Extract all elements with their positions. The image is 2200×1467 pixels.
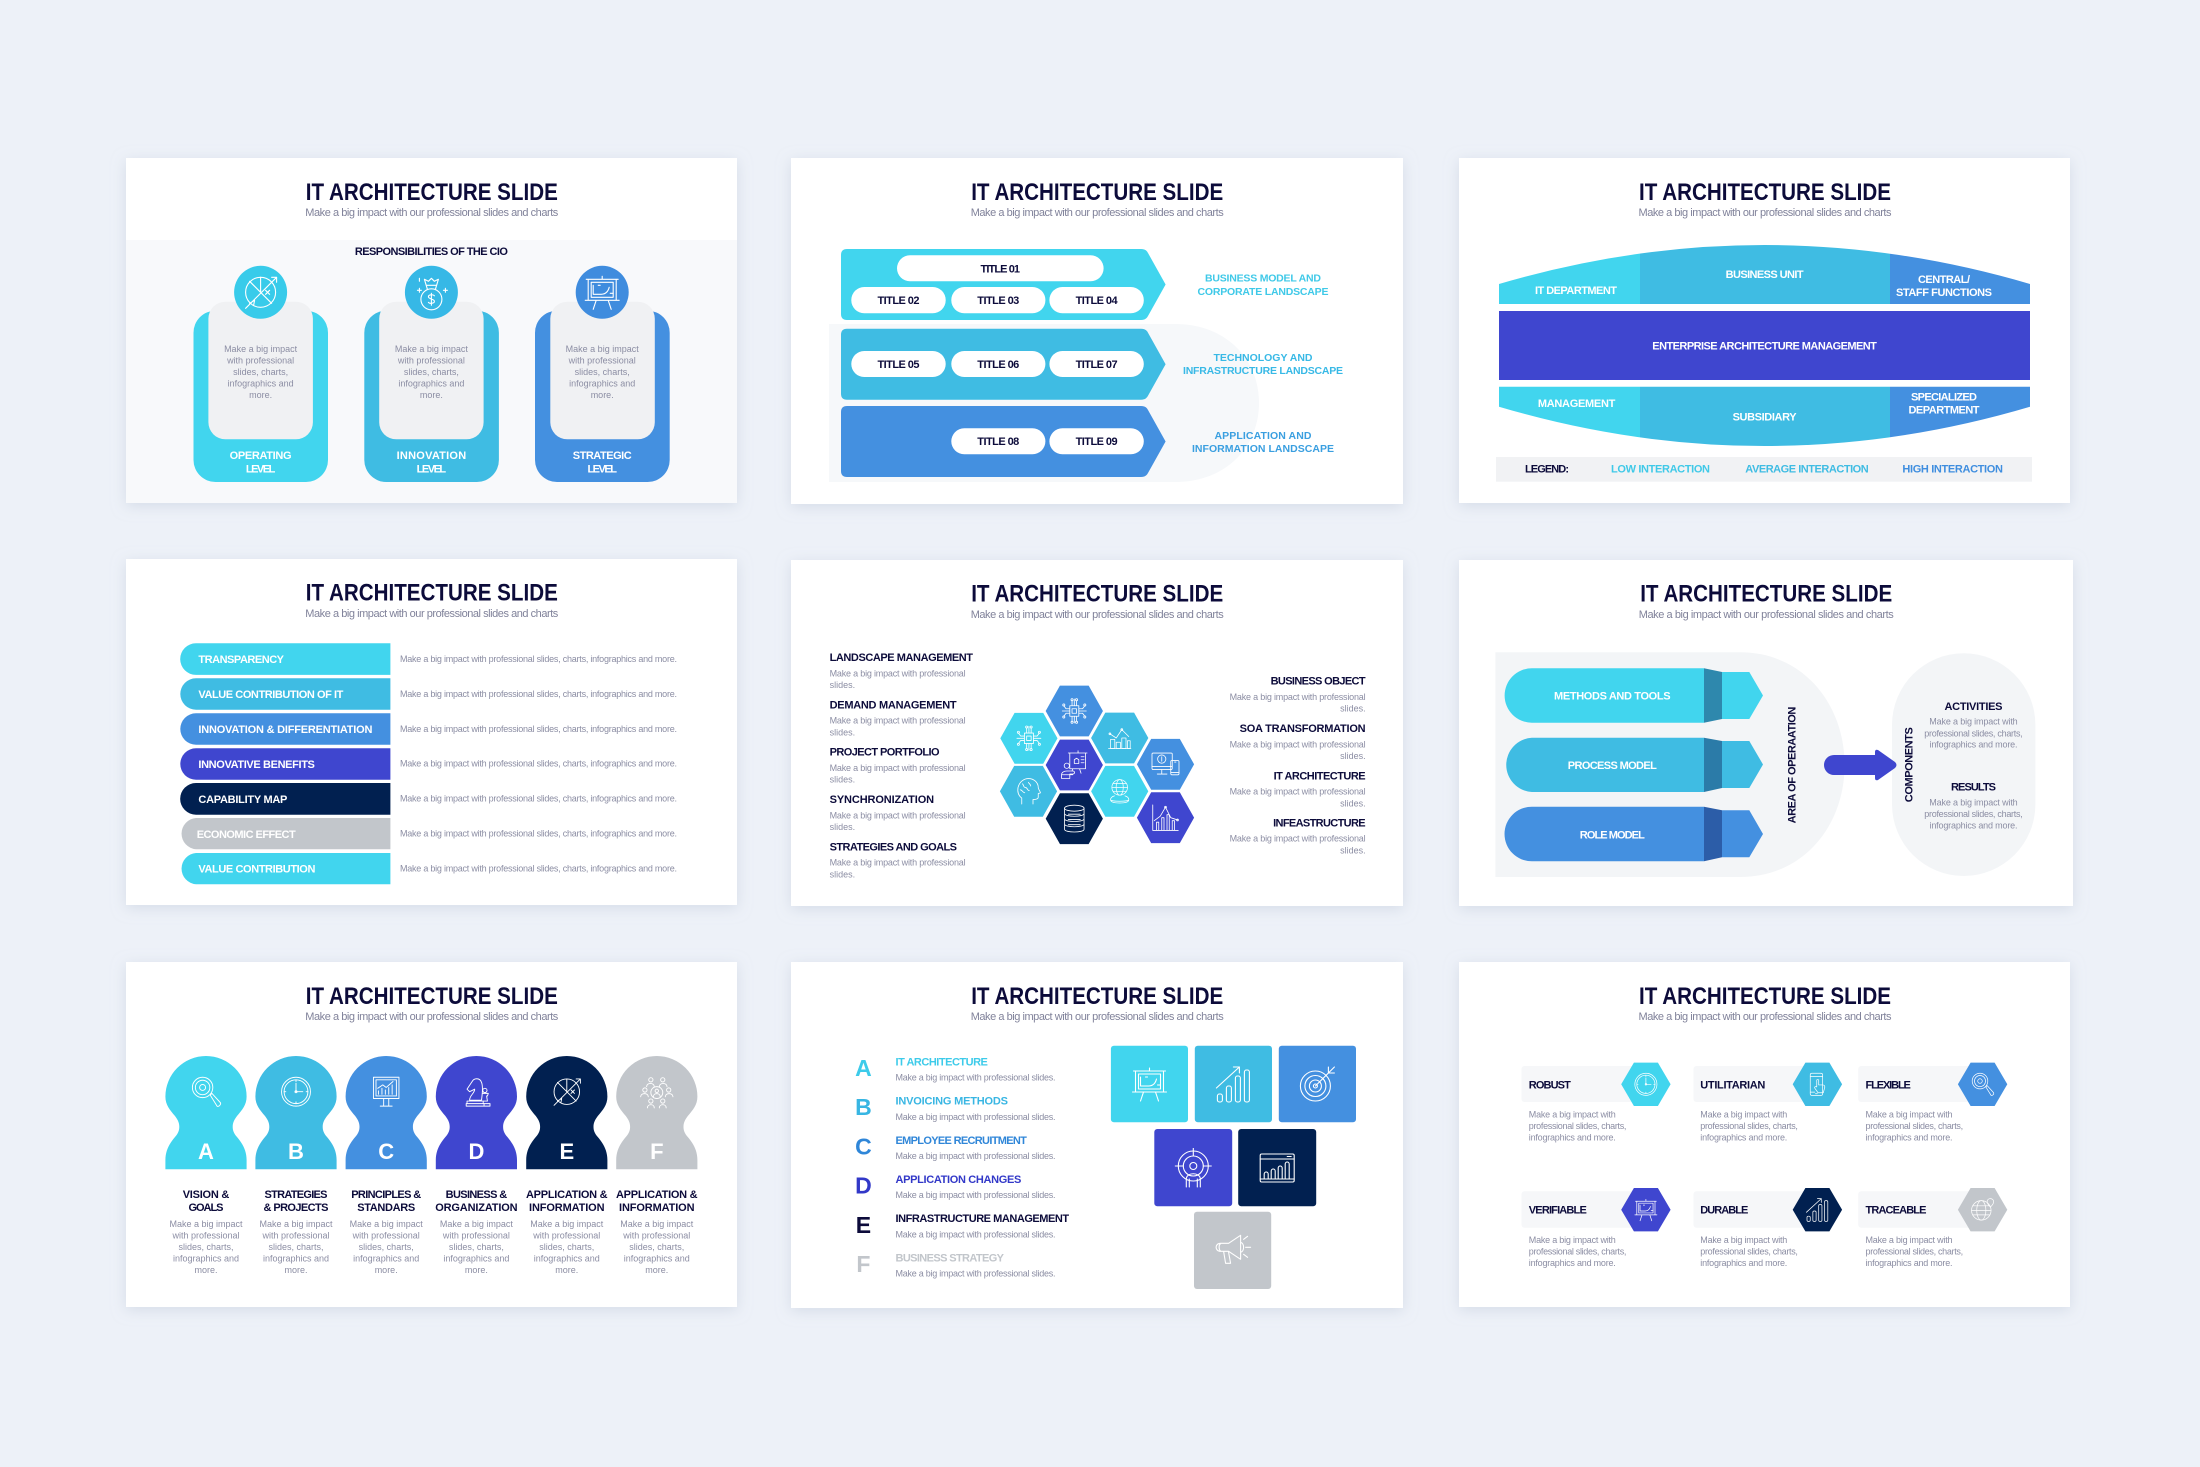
column E: Make a big impact: [530, 1219, 604, 1229]
column F: APPLICATION &: [616, 1189, 698, 1201]
column C: infographics and: [353, 1253, 419, 1263]
column C: [346, 1056, 427, 1275]
column C: Make a big impact: [350, 1219, 423, 1229]
bar: transparency: [180, 643, 677, 675]
column D: Make a big impact: [440, 1219, 513, 1229]
list item A: A: [855, 1055, 872, 1081]
title: IT ARCHITECTURE SLIDE: [971, 983, 1223, 1010]
title: IT ARCHITECTURE SLIDE: [1640, 581, 1892, 608]
list item E: Make a big impact with professional slides.: [896, 1229, 1056, 1239]
item: flexible: Make a big impact with: [1866, 1110, 1952, 1120]
arrow row 2: TITLE 07: [1076, 359, 1118, 371]
arrow row 1: TITLE 02: [878, 295, 920, 307]
bar: capability map: [180, 783, 677, 815]
panel: stacked value bars: [126, 559, 737, 905]
title: IT ARCHITECTURE SLIDE: [971, 179, 1223, 206]
list item D: [855, 1172, 1056, 1200]
slide background: [126, 559, 737, 905]
text: activities: Make a big impact with: [1929, 717, 2018, 727]
item: flexible: professional slides, charts,: [1866, 1121, 1963, 1131]
bar: value contribution of IT: Make a big impact with professional slides, charts, infographics and more.: [400, 689, 677, 699]
subtitle: Make a big impact with our professional slides and charts: [971, 609, 1224, 621]
item: traceable: [1858, 1188, 2007, 1268]
label: application: APPLICATION AND: [1214, 430, 1312, 442]
item: verifiable: Make a big impact with: [1529, 1235, 1616, 1245]
legend: AVERAGE INTERACTION: [1745, 463, 1869, 475]
text: activities: [1924, 701, 2023, 750]
legend: [1496, 457, 2032, 482]
left list: Make a big impact with professional: [830, 668, 966, 678]
bar: capability map: CAPABILITY MAP: [198, 794, 287, 806]
list item A: IT ARCHITECTURE: [896, 1056, 988, 1068]
card: strategic level: slides, charts,: [575, 367, 630, 377]
title: IT ARCHITECTURE SLIDE: [306, 179, 558, 206]
right list: INFEASTRUCTURE: [1273, 817, 1366, 829]
list item E: [856, 1212, 1069, 1239]
arrow row 3: TITLE 09: [1076, 436, 1118, 448]
card: innovation level: [364, 266, 499, 482]
item: utilitarian: Make a big impact with: [1700, 1110, 1787, 1120]
right list: slides.: [1340, 798, 1366, 808]
subtitle: Make a big impact with our professional slides and charts: [971, 1011, 1224, 1023]
left list: Make a big impact with professional: [830, 716, 966, 726]
item: verifiable: infographics and more.: [1529, 1258, 1616, 1268]
item: verifiable: VERIFIABLE: [1529, 1205, 1587, 1217]
column E: APPLICATION &: [526, 1189, 608, 1201]
slide background: [1459, 158, 2070, 503]
column F: Make a big impact: [620, 1219, 694, 1229]
gray band: [126, 240, 737, 503]
title: IT ARCHITECTURE SLIDE: [306, 580, 558, 607]
components pill: [1892, 653, 2035, 876]
card: operating level: Make a big impact: [224, 344, 298, 354]
column F: infographics and: [624, 1253, 690, 1263]
top lens labels: BUSINESS UNIT: [1726, 269, 1804, 281]
bar: innovative benefits: Make a big impact with professional slides, charts, infographics and more.: [400, 758, 677, 768]
column F: slides, charts,: [629, 1242, 684, 1252]
column B: more.: [284, 1265, 308, 1275]
label: business model: [1198, 272, 1328, 298]
text: activities: ACTIVITIES: [1944, 701, 2002, 713]
item: robust: [1522, 1063, 1671, 1143]
left list: slides.: [830, 822, 855, 832]
top lens: [1499, 240, 2030, 304]
item: utilitarian: [1694, 1063, 1842, 1143]
text: activities: professional slides, charts,: [1924, 728, 2023, 738]
arrow: methods and tools: [1505, 668, 1763, 723]
item: durable: infographics and more.: [1700, 1258, 1787, 1268]
text: results: RESULTS: [1951, 782, 1996, 794]
item: robust: ROBUST: [1529, 1079, 1571, 1091]
column F: [616, 1056, 698, 1275]
slide background: [1459, 560, 2073, 906]
label: business model: BUSINESS MODEL AND: [1205, 272, 1321, 284]
left list: slides.: [830, 775, 855, 785]
column C: more.: [375, 1265, 398, 1275]
slide background: [126, 962, 737, 1307]
item: durable: [1694, 1188, 1842, 1268]
column D: BUSINESS &: [446, 1189, 507, 1201]
panel: landscape arrows: [791, 158, 1403, 504]
list item D: Make a big impact with professional slides.: [896, 1190, 1056, 1200]
item: verifiable: professional slides, charts,: [1529, 1246, 1626, 1256]
label: technology: TECHNOLOGY AND: [1214, 352, 1313, 364]
column D: infographics and: [443, 1253, 509, 1263]
list item B: Make a big impact with professional slides.: [896, 1112, 1056, 1122]
connector arrow: [1824, 750, 1896, 780]
arrow row 1: [841, 249, 1166, 320]
right list: [1230, 676, 1366, 855]
top lens labels: IT DEPARTMENT: [1535, 285, 1617, 297]
bottom lens labels: SPECIALIZED: [1911, 392, 1977, 404]
card: operating level: slides, charts,: [233, 367, 288, 377]
gray backdrop: [1495, 652, 1845, 877]
enterprise architecture band: ENTERPRISE ARCHITECTURE MANAGEMENT: [1652, 340, 1877, 352]
gray backdrop: [829, 324, 1259, 482]
subtitle: Make a big impact with our professional slides and charts: [1638, 1011, 1892, 1023]
card: strategic level: STRATEGIC: [573, 450, 632, 462]
right list: slides.: [1340, 704, 1366, 714]
card: innovation level: INNOVATION: [397, 450, 466, 462]
bar: transparency: TRANSPARENCY: [198, 654, 285, 666]
bar: value contribution: [182, 853, 677, 884]
column D: [435, 1056, 518, 1275]
card: strategic level: more.: [591, 390, 614, 400]
right list: SOA TRANSFORMATION: [1240, 723, 1366, 735]
left list: Make a big impact with professional: [830, 810, 966, 820]
bar: innovation and differentiation: [180, 713, 677, 745]
list item B: INVOICING METHODS: [896, 1096, 1008, 1108]
left list: Make a big impact with professional: [830, 763, 966, 773]
vertical label: area of operation: AREA OF OPERAATION: [1786, 707, 1798, 823]
column A: VISION &: [183, 1189, 229, 1201]
bar: innovative benefits: [180, 748, 677, 780]
list item E: E: [856, 1212, 871, 1238]
panel: honeycomb: [791, 560, 1403, 906]
card: strategic level: with professional: [568, 356, 636, 366]
bar: value contribution of IT: [180, 678, 677, 710]
bar: economic effect: Make a big impact with professional slides, charts, infographics and more.: [400, 828, 677, 838]
card: innovation level: LEVEL: [417, 464, 446, 476]
column C: STANDARS: [357, 1202, 415, 1214]
left list: PROJECT PORTFOLIO: [830, 747, 940, 759]
column D: slides, charts,: [449, 1242, 504, 1252]
item: traceable: TRACEABLE: [1866, 1205, 1926, 1217]
icon tiles: [1111, 1046, 1356, 1289]
subtitle: Make a big impact with our professional slides and charts: [1638, 207, 1892, 219]
right list: slides.: [1340, 751, 1366, 761]
item: robust: Make a big impact with: [1529, 1110, 1616, 1120]
column F: more.: [645, 1265, 668, 1275]
column C: PRINCIPLES &: [351, 1189, 421, 1201]
list item F: [856, 1251, 1056, 1278]
list item C: C: [855, 1134, 872, 1160]
arrow: process model: PROCESS MODEL: [1568, 760, 1657, 772]
list item C: Make a big impact with professional slides.: [896, 1151, 1056, 1161]
item: verifiable: [1522, 1188, 1671, 1268]
list item F: BUSINESS STRATEGY: [896, 1252, 1005, 1264]
column F: INFORMATION: [619, 1202, 695, 1214]
subtitle: Make a big impact with our professional slides and charts: [305, 207, 559, 219]
label: technology: [1183, 352, 1343, 377]
column A: with professional: [171, 1230, 240, 1240]
enterprise architecture band: [1499, 311, 2030, 380]
right list: Make a big impact with professional: [1230, 834, 1366, 844]
column D: more.: [465, 1265, 488, 1275]
title: IT ARCHITECTURE SLIDE: [1639, 983, 1891, 1010]
bar: value contribution of IT: VALUE CONTRIBUTION OF IT: [198, 689, 344, 701]
list item D: D: [855, 1172, 872, 1198]
list item B: [855, 1094, 1056, 1122]
hexagon grid with icons: [999, 685, 1195, 845]
bar: innovation and differentiation: Make a big impact with professional slides, charts, infographics and more.: [400, 724, 677, 734]
column B: STRATEGIES: [264, 1189, 328, 1201]
bottom lens labels: [1538, 392, 1980, 424]
slide background: [791, 158, 1403, 504]
item: utilitarian: UTILITARIAN: [1700, 1079, 1765, 1091]
right list: BUSINESS OBJECT: [1271, 676, 1366, 688]
arrow row 2: [841, 329, 1166, 400]
right list: IT ARCHITECTURE: [1274, 770, 1366, 782]
card: operating level: LEVEL: [246, 464, 276, 476]
column B: B: [288, 1139, 304, 1164]
card: strategic level: [535, 266, 670, 482]
card: operating level: more.: [249, 390, 272, 400]
card: strategic level: LEVEL: [587, 464, 617, 476]
item: traceable: Make a big impact with: [1866, 1235, 1952, 1245]
list item B: B: [855, 1094, 872, 1120]
item: flexible: [1858, 1063, 2007, 1143]
column B: infographics and: [263, 1253, 329, 1263]
vertical label: components: COMPONENTS: [1904, 727, 1916, 802]
item: durable: Make a big impact with: [1700, 1235, 1787, 1245]
column B: [255, 1056, 337, 1275]
legend: HIGH INTERACTION: [1902, 463, 2003, 475]
subtitle: Make a big impact with our professional slides and charts: [305, 608, 559, 620]
bar: innovation and differentiation: INNOVATION & DIFFERENTIATION: [198, 724, 372, 736]
bottom lens: [1499, 386, 2030, 450]
column D: with professional: [442, 1230, 510, 1240]
arrow row 1: TITLE 01: [981, 263, 1020, 275]
text: results: infographics and more.: [1930, 820, 2018, 830]
arrow row 3: [841, 406, 1166, 477]
left list: [830, 652, 973, 879]
list item F: F: [856, 1251, 870, 1277]
panel: lettered list with icon tiles: [791, 962, 1403, 1308]
item: utilitarian: professional slides, charts,: [1700, 1121, 1798, 1131]
left list: SYNCHRONIZATION: [830, 794, 934, 806]
list item C: EMPLOYEE RECRUITMENT: [896, 1135, 1027, 1147]
column A: Make a big impact: [169, 1219, 243, 1229]
bar: value contribution: VALUE CONTRIBUTION: [198, 864, 315, 876]
card: innovation level: Make a big impact: [395, 344, 468, 354]
column B: with professional: [261, 1230, 330, 1240]
text: results: professional slides, charts,: [1924, 809, 2023, 819]
slide background: [791, 962, 1403, 1308]
slide background: [126, 158, 737, 503]
label: application: [1192, 430, 1334, 455]
column B: slides, charts,: [268, 1242, 324, 1252]
card: innovation level: with professional: [397, 356, 465, 366]
text: results: Make a big impact with: [1929, 797, 2018, 807]
arrow row 1: TITLE 03: [977, 295, 1019, 307]
column C: C: [378, 1139, 394, 1164]
panel: responsibilities of the CIO: [126, 158, 737, 503]
arrow: methods and tools: METHODS AND TOOLS: [1554, 691, 1671, 703]
bar: economic effect: [182, 818, 677, 849]
right list: Make a big impact with professional: [1230, 787, 1366, 797]
column A: infographics and: [173, 1253, 239, 1263]
left list: STRATEGIES AND GOALS: [830, 841, 957, 853]
top lens labels: [1535, 269, 1992, 299]
card: innovation level: infographics and: [398, 379, 464, 389]
column F: with professional: [622, 1230, 690, 1240]
column B: & PROJECTS: [264, 1202, 328, 1214]
item: flexible: FLEXIBLE: [1866, 1079, 1911, 1091]
column A: A: [198, 1139, 214, 1164]
arrow: role model: [1505, 807, 1763, 861]
item: durable: professional slides, charts,: [1700, 1246, 1798, 1256]
column C: slides, charts,: [359, 1242, 414, 1252]
bar: innovative benefits: INNOVATIVE BENEFITS: [198, 759, 315, 771]
column E: with professional: [532, 1230, 600, 1240]
card: innovation level: more.: [420, 390, 443, 400]
left list: slides.: [830, 727, 855, 737]
bar: value contribution: Make a big impact with professional slides, charts, infographics and more.: [400, 864, 677, 874]
panel: keyhole columns: [126, 962, 737, 1307]
column E: [526, 1056, 608, 1275]
heading: responsibilities: RESPONSIBILITIES OF THE CIO: [355, 246, 508, 258]
legend: LEGEND:: [1525, 463, 1569, 475]
legend: LOW INTERACTION: [1611, 463, 1710, 475]
list item A: [855, 1055, 1056, 1083]
arrow: role model: ROLE MODEL: [1580, 829, 1645, 841]
column A: slides, charts,: [178, 1242, 234, 1252]
right list: Make a big impact with professional: [1230, 692, 1366, 702]
column B: Make a big impact: [259, 1219, 333, 1229]
column E: E: [559, 1139, 574, 1164]
label: technology: INFRASTRUCTURE LANDSCAPE: [1183, 365, 1343, 377]
arrow row 2: TITLE 05: [878, 359, 920, 371]
item: robust: infographics and more.: [1529, 1133, 1616, 1143]
column A: more.: [194, 1265, 218, 1275]
item: robust: professional slides, charts,: [1529, 1121, 1626, 1131]
column D: D: [468, 1139, 484, 1164]
panel: hexagon qualities: [1459, 962, 2070, 1307]
card: operating level: with professional: [226, 356, 294, 366]
text: results: [1924, 782, 2023, 830]
item: utilitarian: infographics and more.: [1700, 1133, 1787, 1143]
column E: INFORMATION: [529, 1202, 605, 1214]
title: IT ARCHITECTURE SLIDE: [1639, 179, 1891, 206]
text: activities: infographics and more.: [1930, 740, 2018, 750]
bottom lens labels: MANAGEMENT: [1538, 398, 1616, 410]
column A: [165, 1056, 247, 1275]
bottom lens labels: SUBSIDIARY: [1733, 412, 1797, 424]
column E: more.: [555, 1265, 578, 1275]
label: business model: CORPORATE LANDSCAPE: [1198, 286, 1328, 298]
item: durable: DURABLE: [1700, 1205, 1748, 1217]
list item C: [855, 1134, 1056, 1161]
column F: F: [650, 1139, 664, 1164]
bar: economic effect: ECONOMIC EFFECT: [197, 829, 296, 841]
bar: transparency: Make a big impact with professional slides, charts, infographics and more.: [400, 654, 677, 664]
card: operating level: [194, 266, 328, 482]
column E: slides, charts,: [539, 1242, 594, 1252]
title: IT ARCHITECTURE SLIDE: [971, 581, 1223, 608]
right list: slides.: [1340, 845, 1366, 855]
column C: with professional: [352, 1230, 420, 1240]
item: flexible: infographics and more.: [1866, 1133, 1952, 1143]
subtitle: Make a big impact with our professional slides and charts: [971, 207, 1224, 219]
arrow row 1: TITLE 04: [1076, 295, 1118, 307]
top lens labels: CENTRAL/: [1918, 274, 1970, 286]
arrow row 3: TITLE 08: [977, 436, 1019, 448]
list item A: Make a big impact with professional slides.: [896, 1073, 1056, 1083]
card: operating level: infographics and: [228, 379, 294, 389]
left list: slides.: [830, 869, 855, 879]
list item F: Make a big impact with professional slides.: [896, 1268, 1056, 1278]
bar: capability map: Make a big impact with professional slides, charts, infographics and more.: [400, 794, 677, 804]
card: strategic level: Make a big impact: [566, 344, 639, 354]
column A: GOALS: [188, 1202, 224, 1214]
left list: DEMAND MANAGEMENT: [830, 699, 957, 711]
list item E: INFRASTRUCTURE MANAGEMENT: [896, 1213, 1069, 1225]
left list: Make a big impact with professional: [830, 858, 966, 868]
column D: ORGANIZATION: [435, 1202, 518, 1214]
left list: slides.: [830, 680, 855, 690]
item: traceable: infographics and more.: [1866, 1258, 1952, 1268]
left list: LANDSCAPE MANAGEMENT: [830, 652, 973, 664]
arrow: process model: [1506, 738, 1763, 792]
panel: area of operation and components: [1459, 560, 2073, 906]
slide background: [1459, 962, 2070, 1307]
label: application: INFORMATION LANDSCAPE: [1192, 443, 1334, 455]
subtitle: Make a big impact with our professional slides and charts: [305, 1011, 559, 1023]
right list: Make a big impact with professional: [1230, 739, 1366, 749]
slide background: [791, 560, 1403, 906]
card: operating level: OPERATING: [230, 450, 292, 462]
arrow row 2: TITLE 06: [977, 359, 1019, 371]
panel: enterprise architecture lens: [1459, 158, 2070, 503]
list item D: APPLICATION CHANGES: [896, 1174, 1021, 1186]
title: IT ARCHITECTURE SLIDE: [306, 983, 558, 1010]
subtitle: Make a big impact with our professional slides and charts: [1639, 609, 1894, 621]
card: strategic level: infographics and: [569, 379, 635, 389]
top lens labels: STAFF FUNCTIONS: [1896, 287, 1992, 299]
column E: infographics and: [534, 1253, 600, 1263]
card: innovation level: slides, charts,: [404, 367, 459, 377]
bottom lens labels: DEPARTMENT: [1908, 404, 1980, 416]
item: traceable: professional slides, charts,: [1866, 1246, 1963, 1256]
